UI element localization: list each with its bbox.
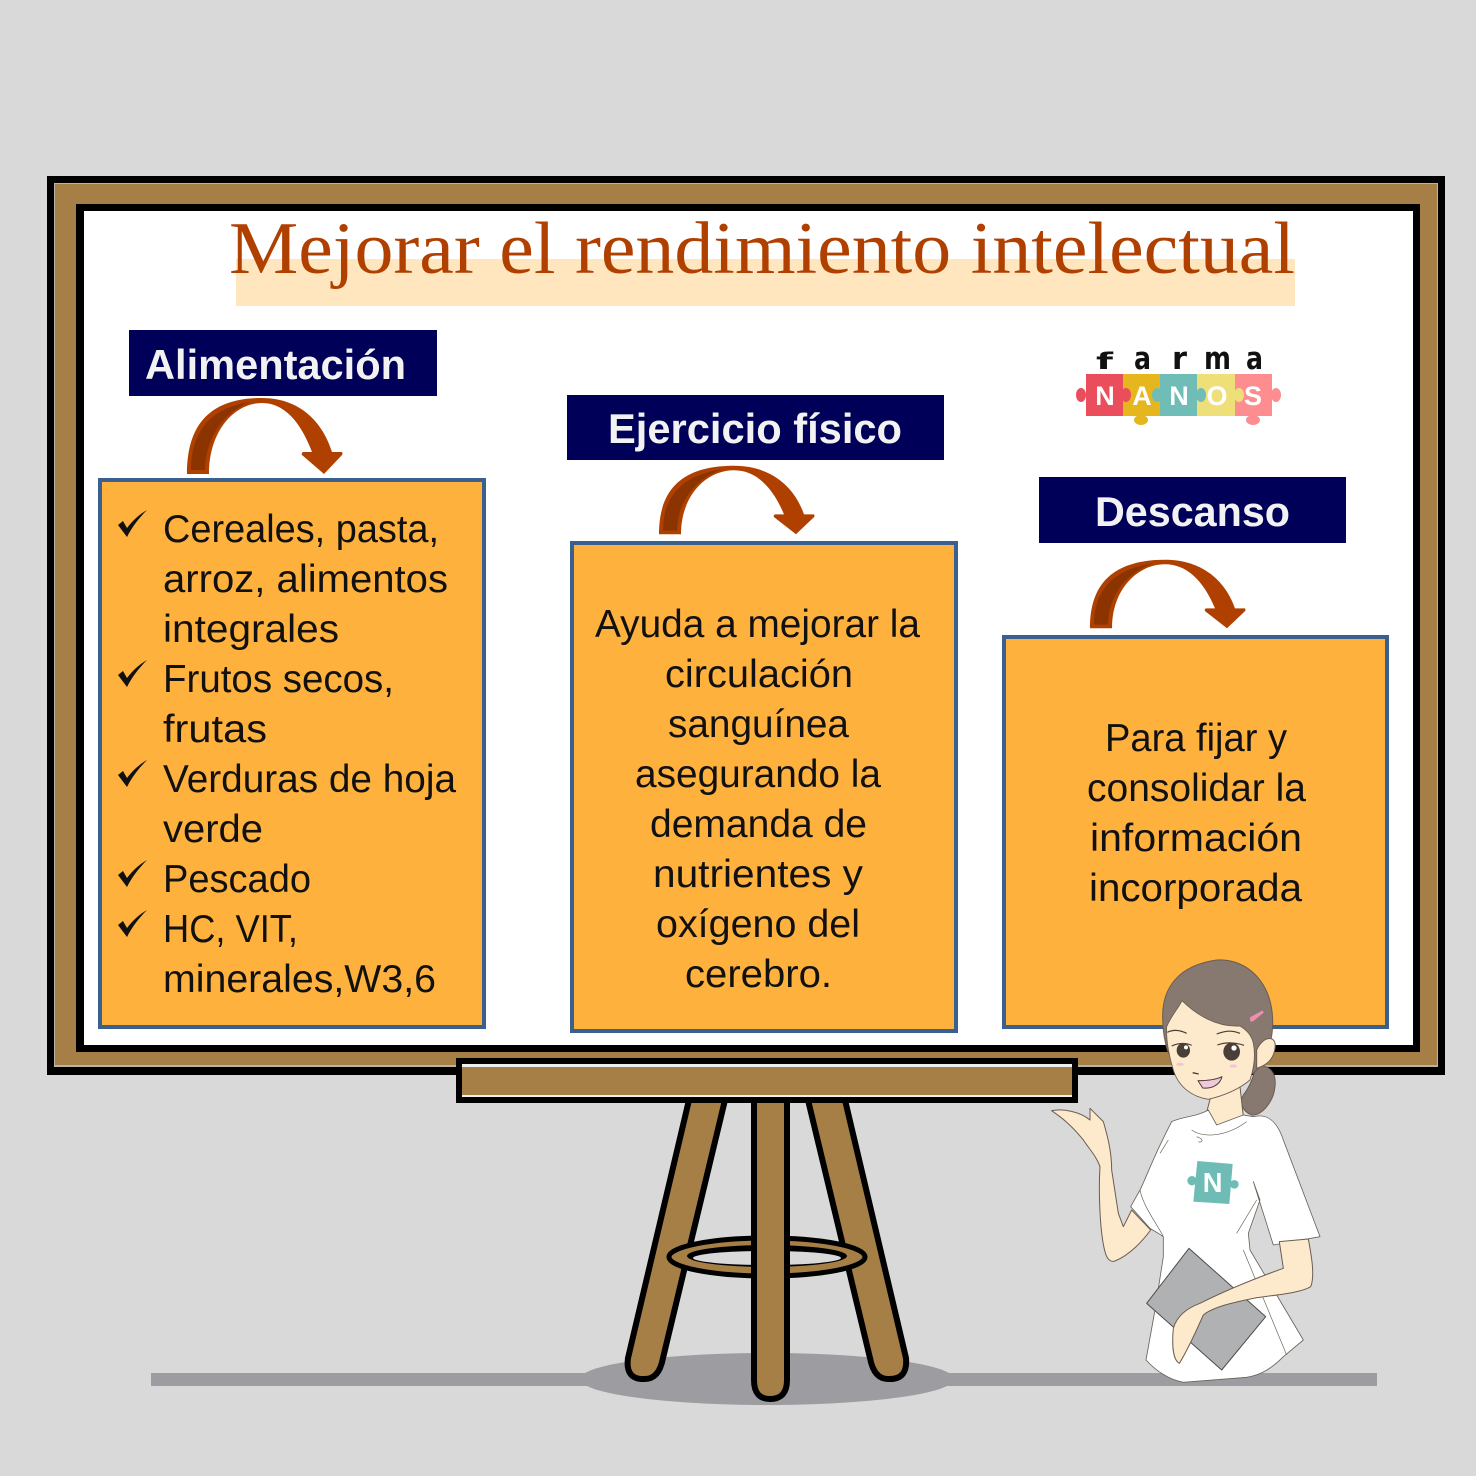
list text: frutas: [163, 708, 267, 751]
logo: farma NANOS: a: [1134, 341, 1151, 377]
logo: farma NANOS: N: [1169, 381, 1189, 411]
list text: minerales,W3,6: [163, 958, 436, 1001]
arrow: Alimentación: [187, 398, 342, 474]
mouth: [1198, 1077, 1222, 1088]
heading: Alimentación: [129, 330, 437, 396]
body text: [1087, 717, 1307, 910]
panel: Ejercicio físico text: [572, 543, 956, 1031]
easel legs: [628, 1100, 906, 1399]
face: [1167, 1001, 1254, 1099]
body text: sanguínea: [668, 703, 850, 746]
body text: consolidar la: [1087, 767, 1307, 810]
heading: Descanso: [1039, 477, 1346, 543]
logo: farma NANOS: r: [1172, 341, 1188, 377]
logo: farma NANOS: N: [1095, 381, 1115, 411]
list text: Cereales, pasta,: [163, 508, 439, 551]
arrow: Descanso: [1090, 560, 1246, 628]
body text: demanda de: [650, 803, 867, 846]
panel: Alimentación list: [100, 480, 484, 1027]
heading: Ejercicio físico: Ejercicio físico: [608, 405, 902, 452]
neck: [1205, 1087, 1243, 1130]
chest badge: N: [1203, 1167, 1223, 1198]
uniform: [1131, 1110, 1320, 1382]
logo: farma NANOS: A: [1132, 381, 1152, 411]
ponytail: [1241, 1065, 1275, 1115]
floor shadow: [151, 1353, 1377, 1405]
chest badge: [1187, 1161, 1239, 1204]
body text: Ayuda a mejorar la: [595, 603, 921, 646]
body text: cerebro.: [685, 953, 832, 996]
heading: Ejercicio físico: [567, 395, 944, 460]
logo: farma NANOS: f: [1096, 349, 1115, 375]
logo: farma NANOS: O: [1206, 381, 1228, 411]
left arm and hand: [1052, 1108, 1151, 1261]
right arm: [1173, 1239, 1313, 1363]
heading: Alimentación: Alimentación: [145, 341, 406, 388]
body text: incorporada: [1089, 867, 1303, 910]
ear: [1257, 1039, 1275, 1068]
body text: asegurando la: [635, 753, 882, 796]
uniform folds: [1140, 1122, 1287, 1355]
list text: Pescado: [163, 858, 311, 901]
list text: integrales: [163, 608, 339, 651]
body text: información: [1090, 817, 1302, 860]
body text: oxígeno del: [656, 903, 860, 946]
hair back: [1163, 960, 1273, 1073]
title: Mejorar el rendimiento intelectual: [229, 208, 1295, 290]
logo: farma NANOS: m: [1204, 341, 1231, 377]
logo: farma NANOS: a: [1246, 341, 1263, 377]
list text: HC, VIT,: [163, 908, 298, 951]
list text: verde: [163, 808, 263, 851]
list text: Frutos secos,: [163, 658, 394, 701]
board frame: [47, 176, 1445, 1075]
list text: [163, 508, 457, 1001]
eyes: [1167, 1030, 1244, 1068]
body text: [595, 603, 921, 996]
list text: Verduras de hoja: [163, 758, 457, 801]
list text: arroz, alimentos: [163, 558, 448, 601]
logo: farma NANOS: [1076, 341, 1281, 425]
arrow: Ejercicio físico: [659, 466, 814, 534]
easel tray: [456, 1058, 1078, 1103]
panel: Descanso text: [1004, 637, 1387, 1027]
clipboard: [1147, 1248, 1266, 1370]
logo: farma NANOS: S: [1244, 381, 1262, 411]
character: nurse presenter: [1052, 960, 1320, 1382]
hair clip: [1250, 1010, 1264, 1022]
body text: Para fijar y: [1105, 717, 1288, 760]
checkmark list: [118, 510, 147, 937]
body text: circulación: [665, 653, 853, 696]
body text: nutrientes y: [653, 853, 864, 896]
heading: Descanso: Descanso: [1095, 488, 1290, 535]
